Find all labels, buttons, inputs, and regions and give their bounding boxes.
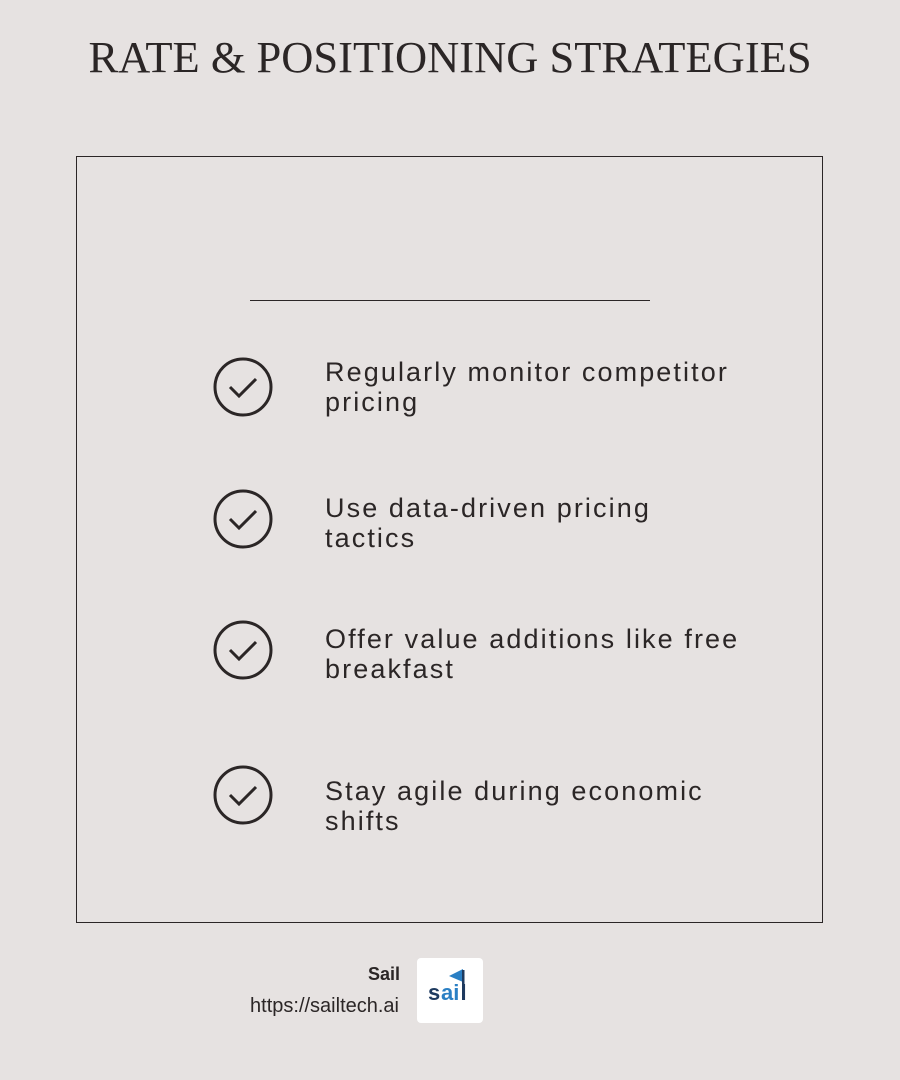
item 1: pricing — [325, 387, 419, 417]
logo: s — [428, 980, 440, 1005]
item 3: Offer value additions like free — [325, 624, 739, 654]
item 3 — [214, 620, 739, 684]
item 3: breakfast — [325, 654, 455, 684]
item 4 — [214, 766, 704, 836]
item 4: Stay agile during economic — [325, 776, 704, 806]
brand url: https://sailtech.ai — [250, 995, 399, 1017]
item 2: Use data-driven pricing — [325, 493, 651, 523]
logo: l — [460, 980, 467, 1005]
logo — [417, 958, 483, 1023]
divider line — [250, 300, 650, 301]
item 1: Regularly monitor competitor — [325, 357, 729, 387]
item 2: tactics — [325, 523, 416, 553]
title: RATE & POSITIONING STRATEGIES — [88, 32, 812, 82]
item 1 — [214, 357, 729, 417]
panel: strategies — [76, 156, 823, 923]
item 2 — [214, 490, 651, 553]
item 4: shifts — [325, 806, 401, 836]
logo: ai — [441, 980, 459, 1005]
brand name: Sail — [368, 964, 400, 984]
